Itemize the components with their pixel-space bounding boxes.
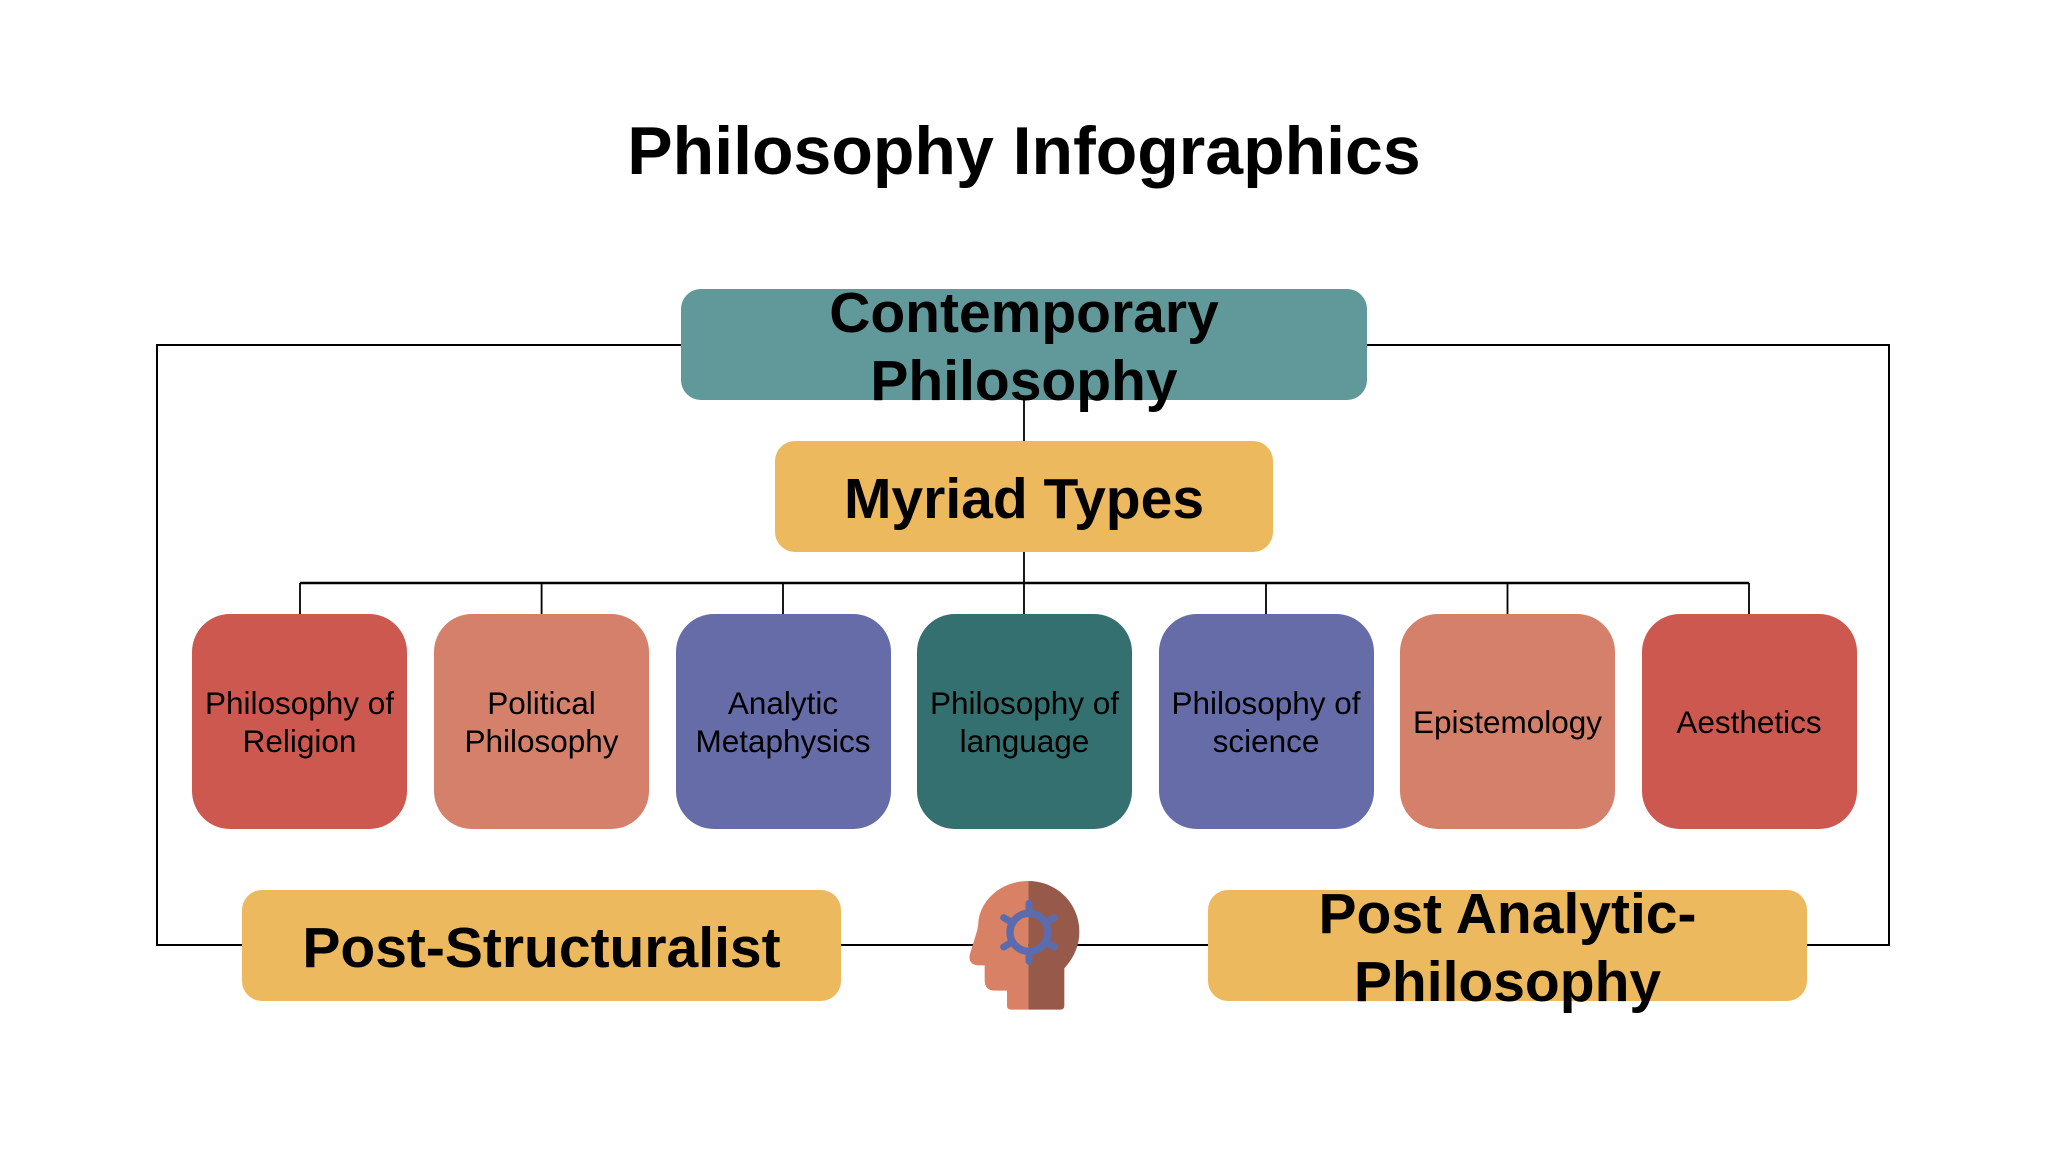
card: Philosophy of language: [917, 614, 1132, 829]
panel: Contemporary Philosophy: Philosophy: [870, 349, 1178, 413]
card: Philosophy of science: [1158, 614, 1374, 829]
card: Political Philosophy: Philosophy: [464, 722, 619, 758]
card: Philosophy of Religion: Religion: [243, 722, 356, 758]
card: Philosophy of science: science: [1213, 722, 1319, 758]
card: Analytic Metaphysics: [676, 614, 890, 829]
card: Analytic Metaphysics: Metaphysics: [695, 722, 871, 758]
card: Aesthetics: Aesthetics: [1676, 704, 1822, 740]
card: Philosophy of Religion: [192, 614, 407, 829]
card: Philosophy of science: Philosophy of: [1171, 684, 1361, 720]
panel: Contemporary Philosophy: [681, 289, 1367, 400]
card: Philosophy of Religion: Philosophy of: [205, 684, 394, 720]
card: Aesthetics: [1642, 614, 1856, 829]
panel: Myriad Types: [775, 441, 1273, 552]
title: Philosophy Infographics: [627, 112, 1421, 188]
panel: Post-Structuralist: [242, 890, 841, 1001]
panel: Myriad Types: Myriad Types: [844, 467, 1204, 531]
panel: Post Analytic-Philosophy: Philosophy: [1354, 950, 1661, 1014]
icon: head with gear: [970, 881, 1080, 1010]
panel: Contemporary Philosophy: Contemporary: [829, 281, 1219, 345]
card: Political Philosophy: Political: [487, 684, 596, 720]
card: Analytic Metaphysics: Analytic: [728, 684, 838, 720]
card: Epistemology: [1400, 614, 1615, 829]
panel: Post-Structuralist: Post-Structuralist: [302, 916, 781, 980]
card: Political Philosophy: [434, 614, 649, 829]
card: Epistemology: Epistemology: [1413, 704, 1602, 740]
card: Philosophy of language: Philosophy of: [930, 684, 1119, 720]
panel: Post Analytic-Philosophy: Post Analytic-: [1319, 882, 1696, 946]
panel: Post Analytic-Philosophy: [1208, 890, 1807, 1001]
card: Philosophy of language: language: [960, 722, 1089, 758]
